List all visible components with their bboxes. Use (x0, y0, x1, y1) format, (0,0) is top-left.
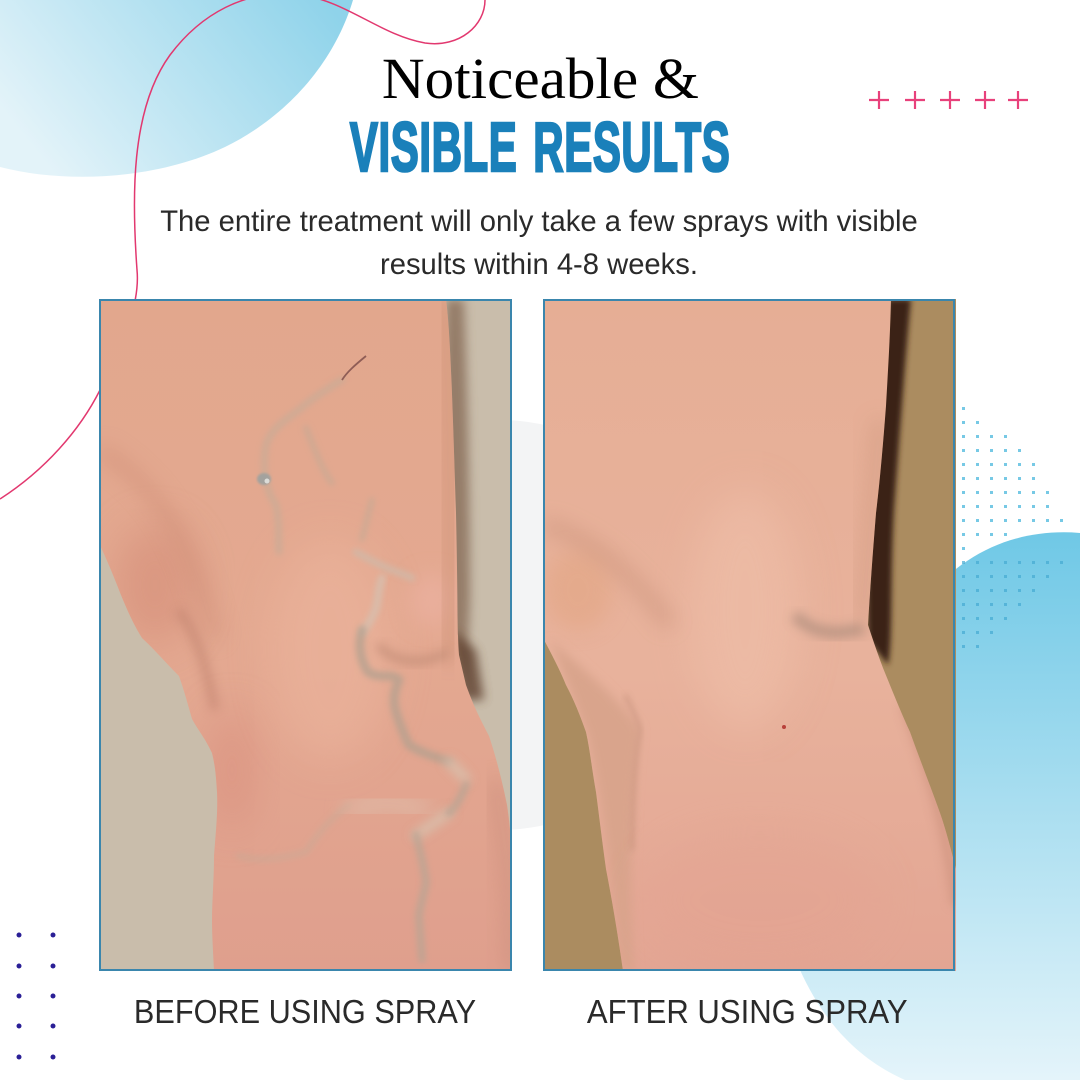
line: pink curve (0, 0, 485, 499)
leg shape (99, 299, 512, 971)
skin tone shading (710, 516, 777, 686)
icon: navy dot grid (16, 932, 56, 1060)
photo background (99, 299, 512, 971)
photo border (544, 300, 954, 970)
dark shadow behind leg (866, 299, 911, 665)
photo background (543, 299, 956, 971)
leg shape (543, 299, 956, 971)
caption: after using spray: AFTER USING SPRAY (587, 993, 907, 1030)
knee crease (795, 615, 864, 632)
shape: pale grey center circle (295, 420, 705, 830)
photo border (100, 300, 511, 970)
photo panel: after (543, 299, 956, 971)
caption: before using spray: BEFORE USING SPRAY (134, 993, 476, 1030)
text block: description: The entire treatment will only take a few sprays with visible (160, 206, 918, 238)
mole (782, 725, 786, 729)
title: Noticeable &: Noticeable & (381, 46, 699, 111)
skin tone shading (116, 530, 192, 640)
text block: description: results within 4-8 weeks. (380, 249, 698, 281)
text block: description (160, 206, 918, 281)
icon: blue halftone dots (962, 407, 1063, 550)
icon: pink plus row (869, 91, 1028, 109)
photo panel: before (99, 299, 512, 971)
shape: top-left blue blob (0, 0, 353, 177)
background shadow behind leg (440, 299, 484, 700)
heading: VISIBLE RESULTS: VISIBLE RESULTS (350, 108, 731, 186)
inner leg fold (557, 650, 636, 960)
shape: bottom-right blue blob (800, 532, 1080, 1080)
varicose veins (239, 380, 466, 959)
